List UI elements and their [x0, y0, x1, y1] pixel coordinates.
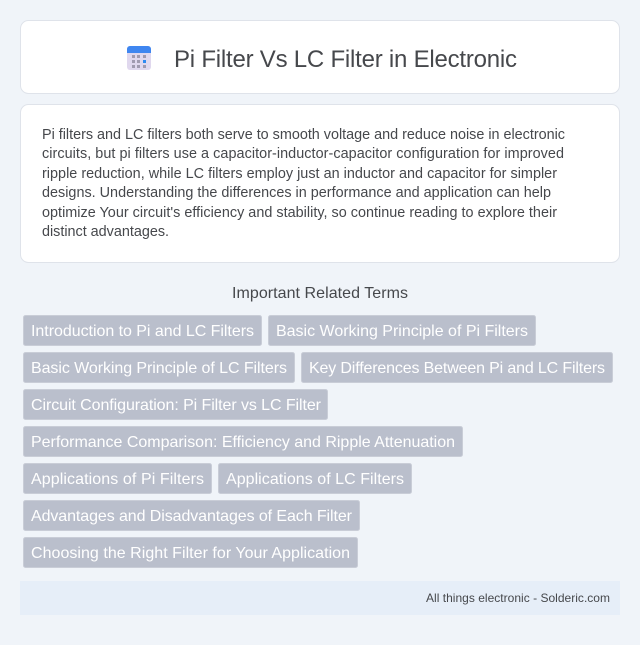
panel: intro paragraph: Pi filters and LC filters both serve to smooth voltage and reduce noise in electronic: [42, 127, 565, 143]
title: Pi Filter Vs LC Filter in Electronic: [174, 46, 517, 73]
footer: [20, 581, 620, 615]
tag: [268, 316, 536, 346]
tag group: [24, 316, 612, 568]
tag: [24, 390, 328, 420]
tag: Advantages and Disadvantages of Each Filter: [31, 508, 353, 525]
panel: intro paragraph: ripple reduction, while LC filters employ just an inductor and capacitor for simpler: [42, 166, 557, 182]
tag: [24, 316, 262, 346]
title panel: [20, 20, 620, 94]
panel: intro paragraph: [20, 104, 620, 262]
tag: [218, 464, 412, 494]
tag: Key Differences Between Pi and LC Filters: [309, 360, 605, 377]
tag: Applications of LC Filters: [226, 471, 404, 488]
panel: intro paragraph: optimize Your circuit's efficiency and stability, so continue reading to explore their: [42, 205, 557, 221]
tag: Circuit Configuration: Pi Filter vs LC Filter: [31, 397, 322, 414]
tag: [24, 538, 358, 568]
tag: Introduction to Pi and LC Filters: [31, 323, 254, 340]
tag: Basic Working Principle of Pi Filters: [276, 323, 528, 340]
icon: calendar: [127, 46, 151, 70]
panel: intro paragraph: distinct advantages.: [42, 224, 169, 240]
tag: [302, 352, 612, 382]
footer: All things electronic - Solderic.com: [426, 591, 610, 605]
tag: Basic Working Principle of LC Filters: [31, 360, 287, 377]
tag: Choosing the Right Filter for Your Application: [31, 545, 350, 562]
panel: intro paragraph: circuits, but pi filters use a capacitor-inductor-capacitor configuration for improved: [42, 146, 564, 162]
tag: Performance Comparison: Efficiency and Ripple Attenuation: [31, 434, 455, 451]
tag: [24, 464, 212, 494]
panel: intro paragraph: designs. Understanding the differences in performance and application can help: [42, 185, 551, 201]
tag: [24, 500, 360, 530]
tag: Applications of Pi Filters: [31, 471, 204, 488]
heading: related terms: Important Related Terms: [232, 285, 408, 302]
tag: [24, 352, 294, 382]
tag: [24, 426, 462, 456]
